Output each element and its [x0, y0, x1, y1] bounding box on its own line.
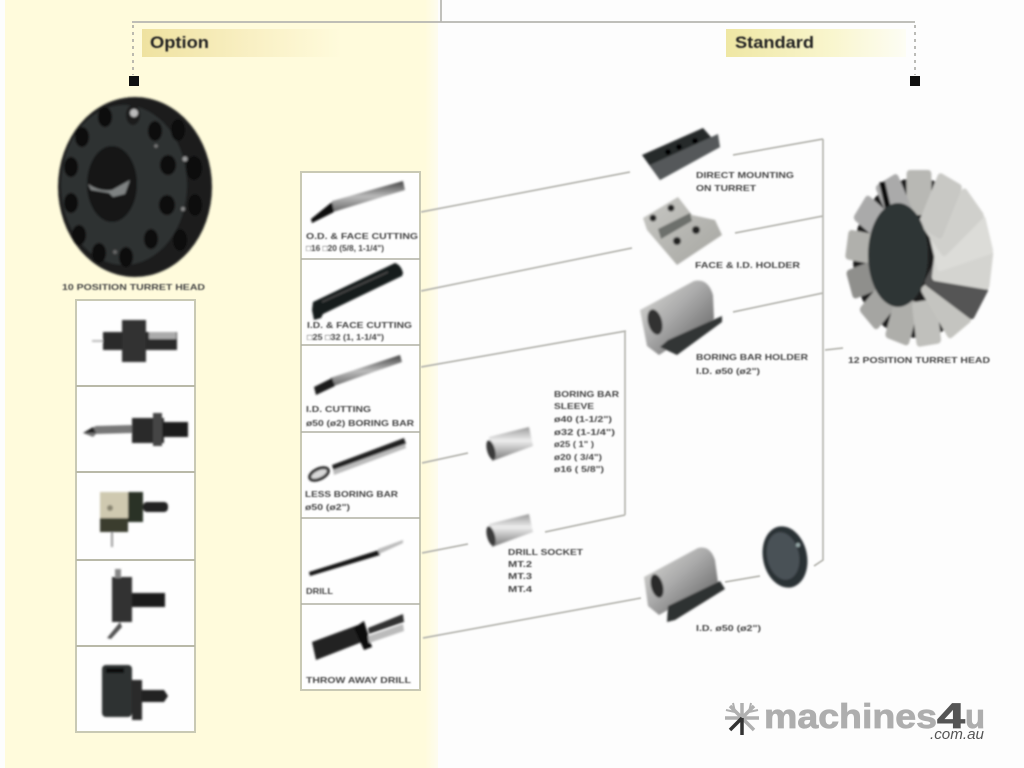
label: face and id holder: FACE & I.D. HOLDER	[695, 260, 800, 270]
icon: logo star	[725, 703, 759, 735]
label: less boring bar: ø50 (ø2")	[305, 502, 350, 512]
label: boring bar holder: BORING BAR HOLDER	[696, 352, 808, 362]
tool: drill	[309, 540, 403, 576]
label: id face cutting: □25 □32 (1, 1-1/4")	[307, 332, 384, 342]
icon: face and id holder	[643, 197, 722, 265]
label: id cutting: I.D. CUTTING	[306, 404, 371, 414]
heading: option	[142, 29, 342, 57]
label: id cutting: ø50 (ø2) BORING BAR	[306, 418, 414, 428]
label: od face cutting: O.D. & FACE CUTTING	[306, 231, 418, 241]
icon: direct mounting block	[642, 128, 720, 180]
label: boring bar sleeve sizes: ø20 ( 3/4")	[554, 452, 602, 462]
label: throw away drill: THROW AWAY DRILL	[306, 675, 411, 685]
icon: drill socket	[485, 514, 533, 547]
label: boring bar holder: I.D. ø50 (ø2")	[696, 366, 760, 376]
logo: machines4u	[725, 697, 985, 743]
icon: straight holder	[92, 320, 177, 362]
label: boring bar sleeve sizes: SLEEVE	[554, 401, 594, 411]
label: drill socket sizes: MT.2	[508, 559, 532, 569]
panel: option background	[5, 0, 438, 768]
icon: boring bar sleeve	[485, 427, 533, 461]
panel: option live tool holders	[76, 300, 195, 732]
heading: standard: Standard	[735, 33, 814, 52]
icon: block holder	[102, 665, 168, 720]
label: less boring bar: LESS BORING BAR	[305, 489, 398, 499]
text: .com.au: .com.au	[930, 727, 984, 743]
heading: option: Option	[150, 33, 209, 52]
label: boring bar sleeve sizes: BORING BAR	[554, 389, 619, 399]
label: direct mounting on turret: ON TURRET	[696, 183, 757, 193]
connectors: tools to holders	[421, 139, 843, 638]
tool: sleeveless boring bar	[308, 438, 406, 483]
label: drill socket sizes: MT.3	[508, 571, 532, 581]
label: direct mounting on turret: DIRECT MOUNTING	[696, 170, 794, 180]
icon: turret cover disc	[757, 522, 813, 592]
text: machines: machines	[764, 698, 937, 736]
label: od face cutting: □16 □20 (5/8, 1-1/4")	[306, 243, 384, 253]
label: boring bar sleeve sizes: ø32 (1-1/4")	[554, 427, 615, 437]
label: boring bar sleeve sizes: ø40 (1-1/2")	[554, 414, 612, 424]
label: drill: DRILL	[306, 586, 333, 596]
label: boring bar sleeve sizes: ø16 ( 5/8")	[554, 464, 604, 474]
label: lower id holder: I.D. ø50 (ø2")	[696, 623, 761, 633]
heading: standard	[726, 29, 906, 57]
icon: 12 position turret head	[845, 170, 994, 347]
tool: boring bar	[314, 355, 402, 395]
text: u: u	[965, 698, 985, 736]
label: 10 position turret head: 10 POSITION TURRET HEAD	[62, 282, 205, 292]
icon: lower id holder	[644, 548, 725, 622]
label: 12 position turret head: 12 POSITION TURRET HEAD	[848, 355, 990, 365]
icon: 10 position turret head	[58, 97, 212, 277]
label: drill socket sizes: MT.4	[508, 584, 532, 594]
label: drill socket sizes: DRILL SOCKET	[508, 547, 584, 557]
icon: angled tip holder	[83, 413, 188, 446]
icon: offset holder	[107, 569, 165, 639]
label: id face cutting: I.D. & FACE CUTTING	[307, 320, 412, 330]
icon: right angle holder	[100, 492, 168, 547]
label: boring bar sleeve sizes: ø25 ( 1" )	[554, 439, 594, 449]
connector: top bracket	[129, 0, 920, 86]
text: 4: 4	[937, 697, 966, 736]
tool: throw away drill	[312, 614, 404, 660]
tool: inner face cutting	[312, 263, 403, 320]
icon: boring bar holder	[640, 281, 722, 355]
panel: cutting tools	[301, 172, 420, 690]
tool: outer face cutting	[311, 181, 405, 223]
